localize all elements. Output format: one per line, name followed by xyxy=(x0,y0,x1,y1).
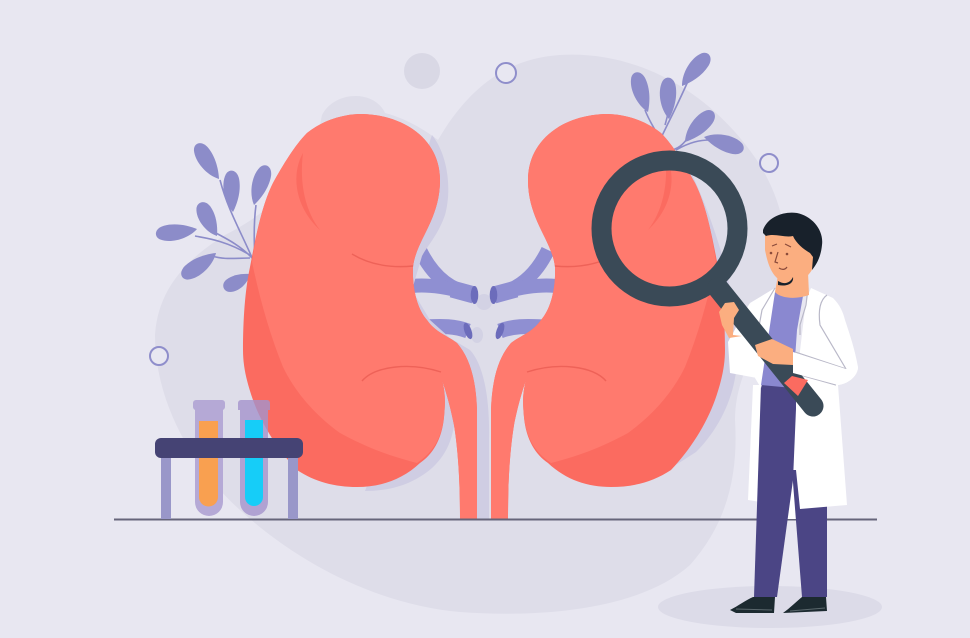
beard shadow xyxy=(778,277,793,286)
renal vessels: left xyxy=(412,250,478,340)
test tube: orange xyxy=(193,400,225,516)
kidney: right xyxy=(491,114,737,519)
kidney: left xyxy=(243,114,489,519)
test tube: blue xyxy=(238,400,270,516)
shirt xyxy=(761,292,803,388)
white coat xyxy=(750,288,858,509)
legs xyxy=(754,385,827,597)
doctor xyxy=(602,160,858,613)
background blob xyxy=(155,55,786,614)
ring: top xyxy=(496,63,516,83)
head xyxy=(765,235,815,283)
magnifying glass xyxy=(602,160,813,406)
renal vessels: right xyxy=(490,250,556,340)
test tube rack xyxy=(155,400,303,519)
ground line xyxy=(114,518,877,520)
vessel shadows xyxy=(471,294,492,343)
face features xyxy=(770,244,791,269)
plant: left xyxy=(155,140,274,296)
hand on handle: right xyxy=(755,339,793,365)
lapels and folds xyxy=(758,288,846,385)
decorative bubble: grey xyxy=(404,53,440,89)
rack top xyxy=(155,438,303,458)
hair xyxy=(763,213,822,270)
coat left sleeve xyxy=(728,303,762,378)
ring: right xyxy=(760,154,778,172)
sleeve cuff: right xyxy=(793,352,858,385)
hand on handle: left xyxy=(719,302,742,338)
plant: right xyxy=(627,48,746,157)
ring: left xyxy=(150,347,168,365)
neck xyxy=(775,272,809,298)
floor shadow xyxy=(658,586,882,628)
coat back panel xyxy=(748,385,800,519)
shoes xyxy=(730,597,827,613)
wrist xyxy=(784,376,808,396)
rack legs xyxy=(161,455,298,519)
